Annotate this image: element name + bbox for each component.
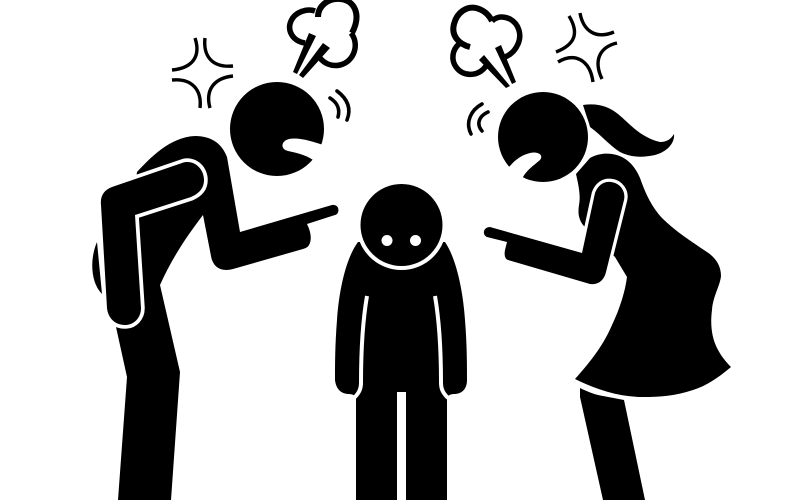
child body (335, 242, 467, 500)
man body and leg (116, 136, 338, 500)
child arm gaps (354, 296, 448, 398)
man back (92, 242, 102, 294)
figure: child (335, 184, 467, 500)
woman mouth (503, 152, 541, 190)
child head (360, 184, 442, 266)
woman head (498, 92, 588, 182)
woman steam cloud (453, 8, 520, 88)
man head (230, 82, 324, 176)
man anger mark (172, 38, 233, 108)
figure: angry woman (453, 8, 731, 500)
child eyes (382, 235, 421, 246)
woman anger mark (556, 13, 617, 82)
woman leg (580, 388, 645, 500)
man mouth (282, 138, 332, 168)
man steam cloud (290, 0, 356, 78)
woman arm (484, 182, 624, 284)
woman ponytail (583, 104, 674, 157)
man arm (101, 162, 204, 325)
woman shout lines (469, 104, 488, 134)
man shout lines (330, 91, 349, 120)
woman dress (575, 154, 731, 397)
figure: angry man (92, 0, 356, 500)
